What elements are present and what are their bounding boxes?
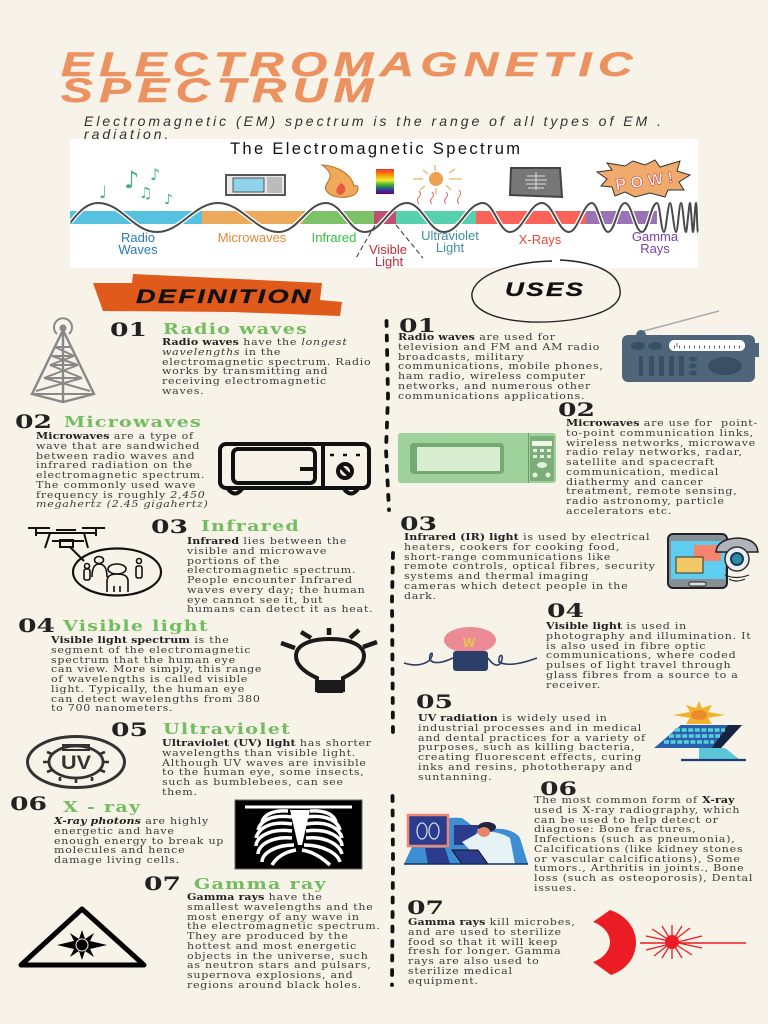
definition 06 text: molecules and hence	[54, 845, 185, 856]
definition 07 number: 07	[144, 873, 181, 895]
definition 02 text: infrared radiation on the	[36, 460, 193, 471]
definition 03 text: waves every day; the human	[187, 585, 365, 596]
uses 05 text	[418, 713, 646, 783]
uses 07 text: food so that it will keep	[408, 937, 558, 948]
uses 06 text: can be used to help detect or	[534, 815, 719, 826]
icon: music notes: ♩	[99, 183, 107, 203]
definition 02 text: wave that are sandwiched	[36, 441, 200, 452]
definition 03 text: portions of the	[187, 556, 280, 567]
definition 02 text: between radio waves and	[36, 451, 195, 462]
spectrum labels: Gamma	[632, 229, 679, 244]
uses 01 text: communications, mobile phones,	[398, 361, 604, 372]
icon: light bulb	[281, 628, 377, 693]
definition 06 text: energetic and have	[54, 826, 175, 837]
icon: sun with heat lines	[413, 165, 462, 204]
uses 01 text: Radio waves are used for	[398, 332, 556, 343]
intro text: radiation.	[84, 126, 171, 142]
spectrum labels: Light	[436, 240, 464, 255]
icon: UV symbol: UV	[61, 753, 91, 774]
definition 07 text: as neutron stars and pulsars,	[187, 960, 372, 971]
uses 06 text: loss (such as osteoporosis), Dental	[534, 873, 753, 884]
definition 04 text: can detect wavelengths from 380	[51, 694, 261, 705]
definition 07 text: hottest and most energetic	[187, 941, 357, 952]
definition 03 text: People encounter Infrared	[187, 575, 353, 586]
intro text: Electromagnetic (EM) spectrum is the range of all types of EM .	[84, 113, 664, 129]
definition 02 number: 02	[15, 411, 52, 433]
title	[61, 46, 639, 110]
uses 03 text	[404, 532, 656, 602]
definition 05 text: Ultraviolet (UV) light has shorter	[162, 738, 372, 749]
uses 07 text: sterilize medical	[408, 966, 513, 977]
icon: music notes: ♪	[164, 192, 173, 208]
uses 04 text: receiver.	[546, 680, 601, 691]
definition banner	[93, 274, 342, 316]
definition 01 text: electromagnetic spectrum. Radio	[162, 357, 371, 368]
uses 06 text: or vascular calcifications), Some	[534, 854, 741, 865]
uses 04 number: 04	[547, 600, 584, 622]
definition 07 text: Gamma rays have the	[187, 892, 323, 903]
definition 05 text	[162, 738, 372, 798]
uses 07 text: rays are also used to	[408, 956, 539, 967]
definition 06 text: X-ray photons are highly	[54, 816, 209, 827]
uses 07 text	[408, 917, 576, 987]
icon: x-ray ribcage	[235, 800, 362, 869]
uses 06 text: The most common form of X-ray	[534, 795, 735, 806]
icon: drone with thermal view	[28, 528, 161, 596]
icon: lamp with cord: W	[463, 635, 476, 650]
uses 03 text: cameras which detect people in the	[404, 581, 628, 592]
uses 06 text: tumors., Arthritis in joints., Bone	[534, 863, 744, 874]
spectrum labels: Visible	[369, 242, 407, 257]
icon: small microwave	[226, 175, 285, 195]
icon: UV symbol	[28, 736, 124, 788]
definition 04 text: Visible light spectrum is the	[51, 635, 230, 646]
uses 02 text: diathermy and cancer	[566, 477, 704, 488]
uses 03 text: remote controls, optical fibres, security	[404, 561, 656, 572]
icon: radio tower	[32, 318, 94, 402]
uses 02 text: treatment, remote sensing,	[566, 486, 737, 497]
spectrum labels: Waves	[118, 242, 158, 257]
icon: radio	[622, 311, 759, 382]
uses 05 text: inks and resins, phototherapy and	[418, 762, 633, 773]
visible light dashed pointers	[356, 225, 423, 258]
uses 02 text: communication, medical	[566, 467, 719, 478]
uses 04 text	[546, 621, 751, 691]
spectrum labels: Rays	[640, 241, 670, 256]
title: ELECTROMAGNETIC	[61, 46, 639, 84]
definition 06 number: 06	[10, 793, 47, 815]
uses 07 number: 07	[407, 897, 444, 919]
icon: black microwave	[220, 444, 369, 494]
uses 05 text: creating fluorescent effects, curing	[418, 752, 642, 763]
icon: x-ray plate	[510, 168, 562, 197]
spectrum labels: Infrared	[312, 230, 356, 245]
uses 02 text: radio relay networks, radar,	[566, 447, 743, 458]
wave line	[71, 203, 698, 232]
definition 05 text: them.	[162, 787, 198, 798]
definition 02 text: frequency is roughly 2,450	[36, 490, 205, 501]
definition 03 number: 03	[151, 516, 188, 538]
panel: spectrum diagram	[70, 139, 698, 269]
uses 06 text: issues.	[534, 883, 577, 894]
icon: green microwave	[398, 433, 556, 483]
uses 05 number: 05	[416, 691, 453, 713]
uses 06 text: diagnose: Bone fractures,	[534, 824, 696, 835]
definition 01 text: wavelengths in the	[162, 347, 281, 358]
uses 04 text: is also used in fibre optic	[546, 641, 706, 652]
definition 02 text: The commonly used wave	[36, 480, 196, 491]
icon: pow burst: POW!	[614, 169, 674, 194]
icon: music notes: ♪	[124, 166, 139, 194]
uses 07 text: fresh for longer. Gamma	[408, 946, 561, 957]
definition 04 text: of wavelengths is called visible	[51, 674, 248, 685]
definition 02 text: Microwaves are a type of	[36, 431, 194, 442]
uses 06 number: 06	[540, 778, 577, 800]
icon: flame	[322, 165, 358, 197]
uses 02 text: to-point communication links,	[566, 428, 754, 439]
uses 03 text: systems and thermal imaging	[404, 571, 589, 582]
definition 07 text: They are produced by the	[187, 931, 349, 942]
uses 05 text: and dental practices for a variety of	[418, 733, 646, 744]
spectrum labels: Light	[375, 254, 403, 269]
definition 05 heading: Ultraviolet	[163, 720, 291, 738]
definition 07 text: smallest wavelengths and the	[187, 902, 374, 913]
definition 04 number: 04	[18, 615, 55, 637]
spectrum labels: Ultraviolet	[421, 228, 479, 243]
icon: music notes: ♪	[150, 165, 160, 184]
spectrum labels: Microwaves	[218, 230, 287, 245]
uses 01 text: communications applications.	[398, 391, 585, 402]
definition 03 text: Infrared lies between the	[187, 536, 347, 547]
definition 03 text: eye cannot see it, but	[187, 595, 323, 606]
definition 05 text: to the human eye, some insects,	[162, 767, 365, 778]
definition 07 text: the electromagnetic spectrum.	[187, 921, 381, 932]
uses 02 number: 02	[558, 399, 595, 421]
uses 01 text: ham radio, wireless computer	[398, 371, 586, 382]
icon: solar panel with sun	[654, 701, 746, 760]
icon: gamma laser	[593, 910, 746, 975]
uses 05 text: suntanning.	[418, 772, 492, 783]
title: SPECTRUM	[61, 72, 380, 110]
uses 02 text: accelerators etc.	[566, 506, 672, 517]
definition 01 text: Radio waves have the longest	[162, 337, 348, 348]
uses 02 text	[566, 418, 758, 517]
uses 06 text: Infections (such as pneumonia),	[534, 834, 736, 845]
uses 07 text: equipment.	[408, 976, 479, 987]
definition 01 number: 01	[110, 319, 147, 341]
definition 01 heading: Radio waves	[163, 320, 308, 338]
definition 02 text	[36, 431, 208, 510]
definition 01 text: waves.	[162, 386, 204, 397]
heading: uses: USES	[505, 280, 585, 301]
uses 05 text: UV radiation is widely used in	[418, 713, 608, 724]
definition 04 text: segment of the electromagnetic	[51, 645, 251, 656]
definition 03 heading: Infrared	[201, 517, 300, 535]
definition 04 text: light. Typically, the human eye	[51, 684, 245, 695]
uses 03 number: 03	[400, 513, 437, 535]
definition 06 text: damage living cells.	[54, 855, 180, 866]
definition 04 heading: Visible light	[63, 617, 209, 635]
definition 06 text	[53, 816, 224, 866]
icon: lamp with cord	[404, 627, 537, 671]
uses 02 text: wireless networks, microwave	[566, 438, 756, 449]
uses 04 text: pulses of light travel through	[546, 660, 731, 671]
uses 01 text	[398, 332, 604, 402]
uses 06 text	[534, 795, 753, 894]
icon: radiation warning triangle	[21, 909, 144, 965]
spectrum labels	[118, 228, 679, 269]
heading: definition: DEFINITION	[136, 287, 313, 308]
uses 03 text: Infrared (IR) light is used by electrical	[404, 532, 650, 543]
uses 03 text: dark.	[404, 591, 437, 602]
definition 03 text	[186, 536, 373, 615]
definition 05 text: wavelengths than visible light.	[162, 748, 356, 759]
spectrum colour bands	[70, 211, 657, 224]
definition 04 text	[50, 635, 262, 714]
uses 01 text: television and FM and AM radio	[398, 342, 600, 353]
icon: music notes: ♫	[139, 184, 152, 202]
definition 04 text: spectrum that the human eye	[51, 655, 236, 666]
uses 03 text: short-range communications like	[404, 552, 611, 563]
definition 07 text: most energy of any wave in	[187, 912, 360, 923]
definition 04 text: can view. More simply, this range	[51, 664, 262, 675]
definition 05 text: Although UV waves are invisible	[162, 758, 367, 769]
definition 05 text: such as bumblebees, can see	[162, 777, 344, 788]
definition 04 text: to 700 nanometers.	[51, 703, 173, 714]
definition 03 text: humans can detect it as heat.	[187, 604, 373, 615]
uses 06 text: used is X-ray radiography, which	[534, 805, 740, 816]
spectrum labels: X-Rays	[519, 232, 562, 247]
icon: rainbow strip	[376, 169, 394, 194]
uses 04 text: photography and illumination. It	[546, 631, 751, 642]
definition 02 heading: Microwaves	[64, 413, 202, 431]
uses 03 text: heaters, cookers for cooking food,	[404, 542, 620, 553]
definition 02 text: megahertz (2.45 gigahertz)	[36, 499, 208, 510]
definition 06 heading: X - ray	[63, 798, 141, 816]
uses 04 text: communications, where coded	[546, 650, 736, 661]
uses 02 text: satellite and spacecraft	[566, 457, 715, 468]
definition 07 heading: Gamma ray	[194, 875, 327, 893]
definition 07 text	[187, 892, 381, 991]
icon: music notes	[99, 165, 173, 208]
uses 01 text: networks, and numerous other	[398, 381, 591, 392]
icon: phone with security camera	[668, 534, 758, 588]
icon: doctor examining x-rays	[404, 815, 528, 864]
icon: pow burst	[597, 160, 690, 197]
uses 01 text: broadcasts, military	[398, 352, 524, 363]
definition 02 text: electromagnetic spectrum.	[36, 470, 205, 481]
uses 07 text: Gamma rays kill microbes,	[408, 917, 576, 928]
definition 07 text: objects in the universe, such	[187, 951, 369, 962]
spectrum labels: Radio	[121, 230, 155, 245]
intro text	[84, 113, 664, 142]
uses 01 number: 01	[399, 315, 436, 337]
definition 05 number: 05	[111, 719, 148, 741]
uses 05 text: purposes, such as killing bacteria,	[418, 742, 635, 753]
center dashed divider	[386, 321, 393, 985]
uses hand-drawn ellipse	[472, 260, 620, 322]
definition 06 text: enough energy to break up	[54, 836, 224, 847]
uses 04 text: glass fibres from a source to a	[546, 670, 739, 681]
uses 06 text: Calcifications (like kidney stones	[534, 844, 743, 855]
diagram title: The Electromagnetic Spectrum	[230, 140, 520, 158]
uses 02 text: radio astronomy, particle	[566, 496, 725, 507]
definition 03 text: visible and microwave	[187, 546, 327, 557]
definition 07 text: supernova explosions, and	[187, 970, 353, 981]
uses 04 text: Visible light is used in	[546, 621, 687, 632]
definition 01 text: works by transmitting and	[162, 366, 328, 377]
definition 01 text	[162, 337, 371, 397]
definition 01 text: receiving electromagnetic	[162, 376, 327, 387]
uses 07 text: and are used to sterilize	[408, 927, 562, 938]
definition 07 text: regions around black holes.	[187, 980, 362, 991]
uses 02 text: Microwaves are use for point-	[566, 418, 758, 429]
uses 05 text: industrial processes and in medical	[418, 723, 642, 734]
definition 03 text: electromagnetic spectrum.	[187, 565, 356, 576]
